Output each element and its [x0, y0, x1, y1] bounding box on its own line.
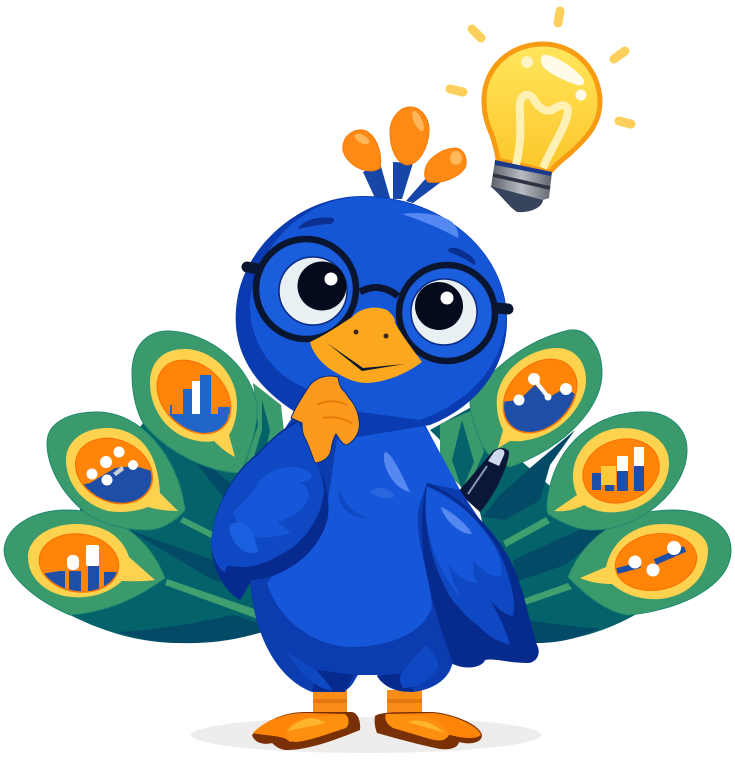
head	[236, 196, 507, 440]
chart: area with dots	[504, 373, 575, 432]
right tail feathers	[430, 330, 731, 643]
chart: bars	[592, 447, 644, 491]
light belly	[267, 420, 460, 647]
right leg and foot	[375, 690, 482, 749]
feather: middle right	[547, 412, 687, 530]
crest orb left	[343, 130, 381, 171]
pen behind wing	[458, 448, 509, 512]
feather: middle left	[47, 412, 185, 530]
bulb rays	[450, 11, 631, 124]
filament	[516, 95, 568, 168]
feather: top right	[470, 330, 602, 467]
chest highlight	[384, 452, 410, 492]
left eye	[279, 257, 347, 325]
chart: bars	[44, 545, 117, 592]
face	[250, 197, 506, 420]
beak	[310, 308, 422, 383]
thigh highlights	[287, 645, 438, 691]
crest	[343, 107, 466, 203]
bulb highlights	[541, 55, 584, 85]
crest orb middle	[390, 107, 429, 165]
feather: bottom left	[4, 510, 165, 615]
right teal underlay	[430, 405, 640, 643]
legs shadow	[312, 670, 413, 692]
right wing	[422, 483, 539, 667]
bulb base	[491, 160, 552, 201]
bulb glass	[484, 44, 600, 172]
right eye	[411, 279, 477, 345]
light bulb	[450, 11, 631, 212]
chest crease	[338, 490, 368, 518]
feather: bottom right	[568, 510, 731, 615]
chart: bars	[169, 375, 230, 433]
chart: scatter hill	[84, 446, 152, 503]
glasses	[247, 239, 508, 361]
left wing	[211, 420, 328, 600]
eyebrows and head sheen	[298, 213, 475, 265]
left tail feathers	[4, 331, 290, 643]
torso	[250, 410, 480, 692]
feather: top left	[132, 331, 257, 473]
left leg and foot	[252, 690, 360, 750]
crest orb right	[425, 148, 466, 182]
right lens	[399, 265, 495, 361]
peacock body	[211, 196, 539, 750]
ground shadow	[191, 717, 541, 753]
left teal underlay	[70, 385, 290, 643]
chart: line	[617, 541, 685, 576]
left lens	[256, 239, 356, 339]
hand on chin	[291, 376, 359, 463]
